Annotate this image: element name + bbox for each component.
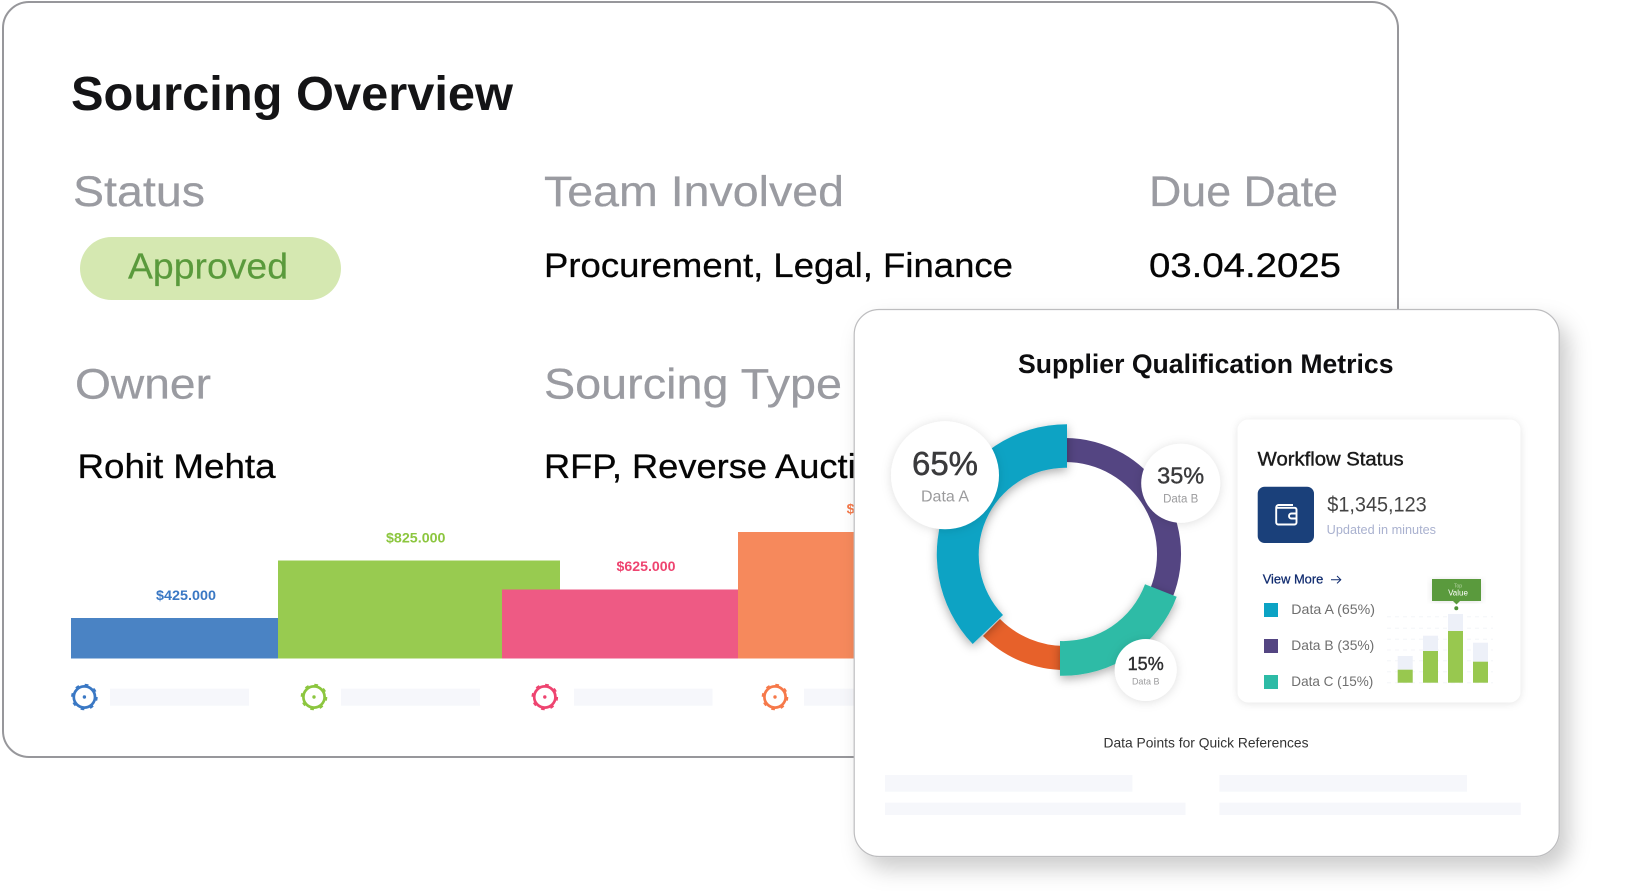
callout: 35% Data B	[1141, 444, 1220, 523]
legend: Data C: Data C (15%)	[1291, 673, 1373, 689]
heading: Sourcing Type: Sourcing Type	[544, 362, 842, 408]
heading: Due Date: Due Date	[1149, 169, 1338, 216]
legend placeholder: orange	[804, 689, 874, 706]
value: owner: Rohit Mehta	[78, 448, 276, 486]
mini bar chart	[1387, 614, 1493, 683]
heading: Owner: Owner	[75, 362, 211, 408]
value: sourcing type: RFP, Reverse Auction	[544, 448, 896, 486]
heading: Status: Status	[73, 169, 205, 216]
status pill: Approved: Approved	[128, 246, 288, 286]
bar chart: spend: $625.000	[616, 558, 676, 574]
donut chart	[937, 424, 1181, 676]
title: Sourcing Overview: Sourcing Overview	[71, 68, 514, 121]
heading: Supplier Qualification Metrics: Supplier Qualification Metrics	[1018, 349, 1394, 379]
caption: updated: Updated in minutes	[1327, 523, 1436, 537]
panel: workflow status	[1238, 420, 1520, 702]
value: team involved: Procurement, Legal, Finance	[544, 247, 1013, 285]
panel: sourcing overview	[3, 2, 1398, 757]
status pill: Approved	[80, 237, 341, 300]
callout: 15% Data B	[1115, 639, 1177, 701]
callout: 15% Data B: Data B	[1132, 677, 1159, 687]
link: View More: View More	[1263, 571, 1323, 586]
tooltip: Top Value	[1432, 579, 1481, 610]
heading: Team Involved: Team Involved	[544, 169, 844, 216]
bar chart: spend: $425.000	[156, 587, 216, 603]
callout: 65% Data A	[891, 421, 999, 529]
legend placeholder: pink	[574, 689, 712, 706]
value: due date: 03.04.2025	[1149, 247, 1341, 285]
icon: pink gear legend	[533, 685, 557, 709]
legend: Data B: Data B (35%)	[1291, 637, 1374, 653]
panel: supplier qualification metrics	[854, 310, 1559, 856]
callout: 65% Data A: Data A	[921, 489, 969, 506]
icon: green gear legend	[302, 685, 326, 709]
legend: Data A: Data A (65%)	[1291, 601, 1375, 617]
bar chart: spend: $925.000	[847, 500, 906, 516]
caption: Data Points for Quick References: Data Points for Quick References	[1104, 734, 1308, 750]
bar chart: spend: $825.000	[386, 530, 446, 546]
bar chart: spend	[71, 500, 906, 658]
callout: 35% Data B: Data B	[1163, 494, 1199, 506]
amount: $1,345,123	[1327, 494, 1427, 517]
heading: Workflow Status: Workflow Status	[1258, 450, 1404, 471]
callout: 65% Data A: 65%	[912, 445, 978, 482]
icon: blue gear legend	[72, 685, 96, 709]
tooltip: Top Value: Value	[1448, 588, 1468, 598]
legend placeholder: green	[341, 689, 480, 706]
icon: wallet	[1258, 487, 1314, 543]
callout: 35% Data B: 35%	[1157, 462, 1204, 488]
callout: 15% Data B: 15%	[1128, 654, 1164, 674]
icon: arrow	[1331, 576, 1341, 583]
placeholder rows	[885, 775, 1521, 815]
icon: orange gear legend	[763, 685, 787, 709]
legend placeholder: blue	[110, 689, 249, 706]
tooltip: Top Value: Top	[1454, 584, 1462, 590]
